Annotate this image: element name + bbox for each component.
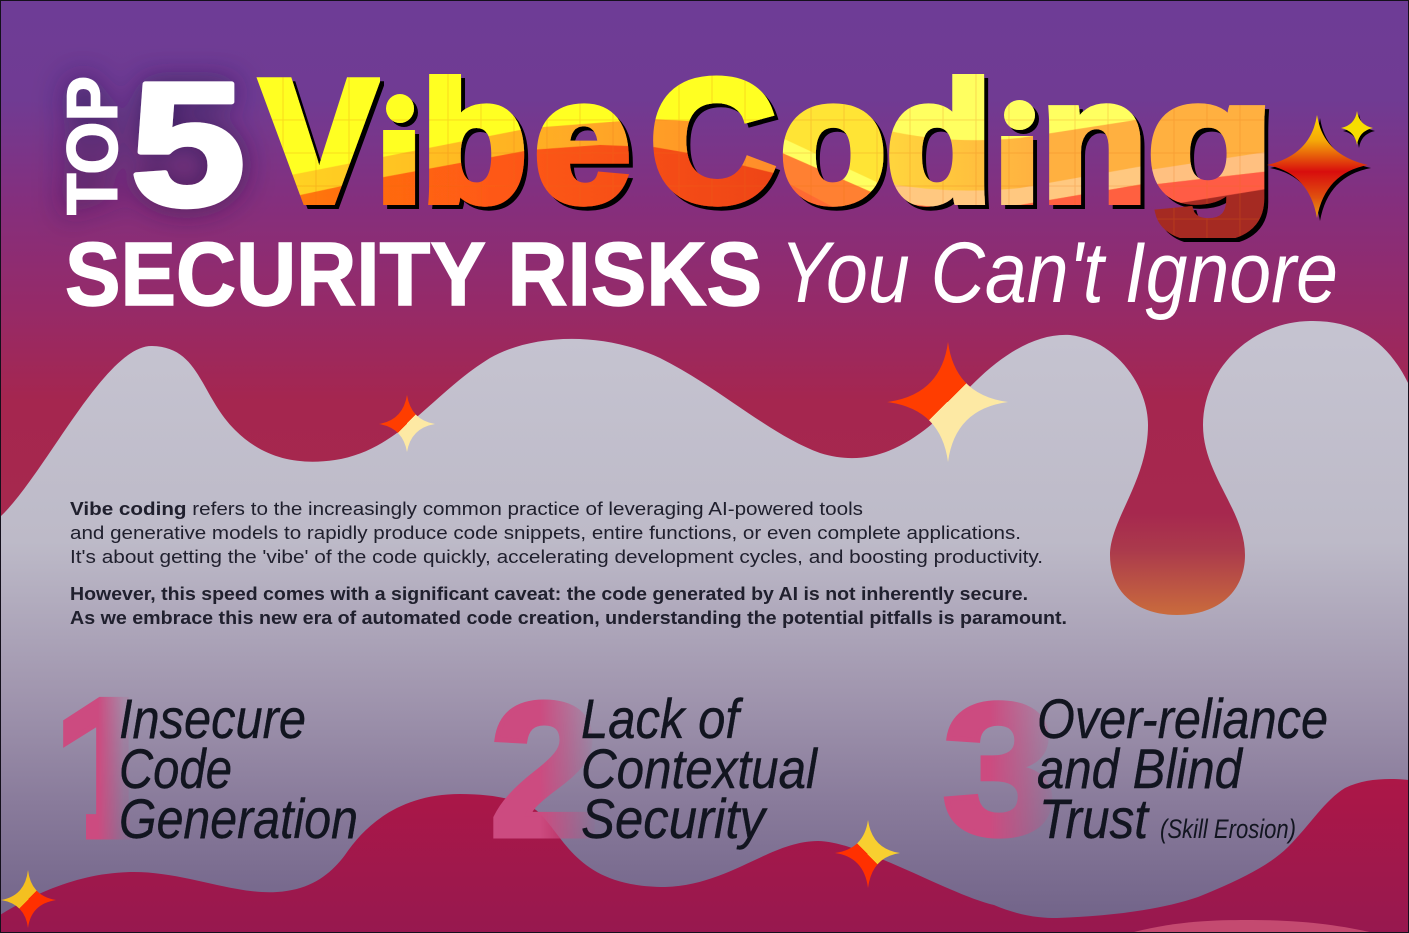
risk 3 line 3: Trust: [1039, 787, 1150, 850]
icon: sparkle on bottom wave: [835, 820, 900, 888]
title: 5: 5: [130, 46, 246, 242]
icon: large sparkle shadow: [1270, 118, 1371, 221]
risk 3 note: (Skill Erosion): [1160, 814, 1296, 844]
bottom pink wave: [1130, 920, 1374, 933]
risk 3 line 1: Over-reliance: [1037, 687, 1328, 750]
intro line 3: It's about getting the 'vibe' of the code quickly, accelerating development cycles, and boosting productivity.: [70, 547, 1043, 567]
risk 2 line 3: Security: [581, 787, 768, 850]
numeral 2: 2: [489, 663, 600, 877]
title: TOP: TOP: [54, 76, 133, 215]
icon: large sparkle on wave: [887, 342, 1008, 462]
bottom crimson wave: [0, 779, 1409, 933]
title word run: VibeCodin: [261, 43, 1147, 238]
icon: sparkle left of wave: [379, 395, 435, 452]
intro text block: [70, 499, 1067, 628]
subtitle: SECURITY RISKS: SECURITY RISKS: [65, 225, 762, 325]
intro line 1: Vibe coding refers to the increasingly common practice of leveraging AI-powered tools: [70, 499, 863, 519]
risk 2 line 2: Contextual: [581, 737, 818, 800]
caveat line 2: As we embrace this new era of automated code creation, understanding the potential pitfalls is paramount.: [70, 608, 1067, 628]
risk 2 heading: [581, 687, 818, 850]
icon: large gradient sparkle: [1267, 115, 1368, 218]
risk 3 heading: [1037, 687, 1328, 850]
icon: bottom-left sparkle: [1, 870, 56, 928]
subtitle: You Can't Ignore: You Can't Ignore: [780, 225, 1338, 321]
numeral 3: 3: [942, 664, 1057, 874]
intro line 2: and generative models to rapidly produce code snippets, entire functions, or even complete applications.: [70, 523, 1021, 543]
numeral 1: 1: [52, 657, 163, 880]
title: TOP and 5: [54, 46, 246, 242]
title letter g: g: [1147, 43, 1274, 238]
title glyphs: [256, 74, 1270, 242]
risk 1 heading: [119, 687, 358, 850]
risk 1 line 2: Code: [119, 737, 232, 800]
icon: small yellow sparkle: [1341, 111, 1373, 145]
panel: gray wave with drip: [0, 321, 1409, 933]
icon: small sparkle shadow: [1343, 114, 1375, 148]
title: Vibe Coding: [256, 74, 1270, 242]
risk 1 line 1: Insecure: [119, 687, 306, 750]
caveat line 1: However, this speed comes with a significant caveat: the code generated by AI is not inherently secure.: [70, 584, 1028, 604]
icon: round dot of second i: [1004, 100, 1035, 130]
icon: round dot of first i: [386, 94, 414, 123]
risk 2 line 1: Lack of: [581, 687, 744, 750]
risk 1 line 3: Generation: [119, 787, 358, 850]
risk 3 line 2: and Blind: [1037, 737, 1244, 800]
title block: [54, 43, 1338, 325]
